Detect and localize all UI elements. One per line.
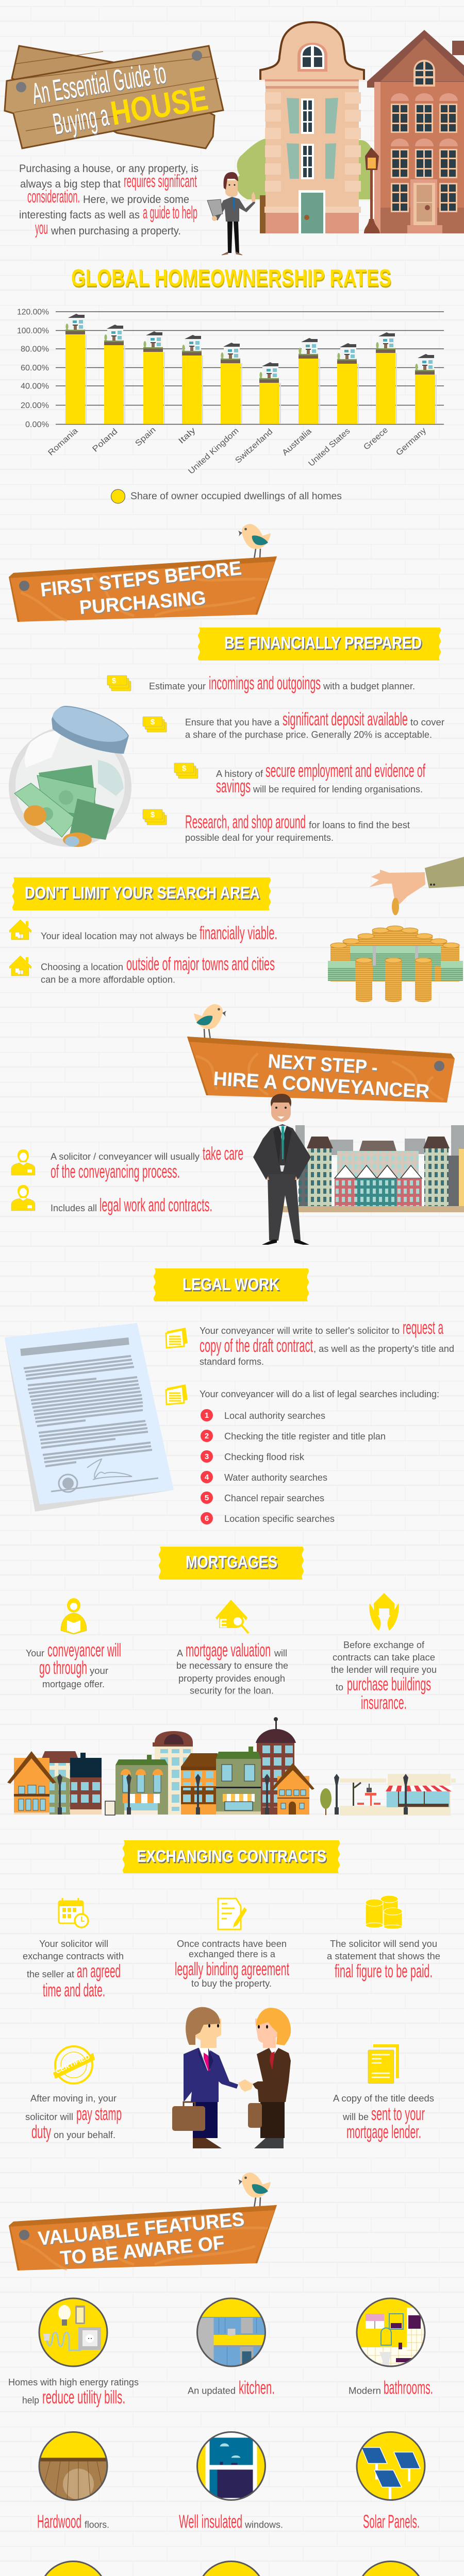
feature: energy ratings: Homes with high energy ratings	[8, 2377, 139, 2387]
mortgage column 3: contracts can take place	[333, 1652, 435, 1663]
intro paragraph: Here, we provide some	[83, 194, 189, 206]
numbered list of legal searches: Checking flood risk	[224, 1452, 305, 1462]
mortgage column 3: Before exchange of	[343, 1640, 425, 1650]
item: draft contract	[166, 1317, 454, 1367]
sign: first steps before purchasing: PURCHASING	[78, 587, 207, 619]
numbered list of legal searches: 3	[205, 1452, 209, 1461]
house markers	[65, 314, 435, 383]
stamp duty column: After moving in, your	[30, 2093, 117, 2104]
chart legend	[111, 489, 342, 503]
pile of coins and cash	[328, 926, 463, 1002]
conveyancer figure	[253, 1094, 311, 1245]
exchange column 2: legally binding agreement	[175, 1958, 289, 1979]
item: viability	[9, 920, 277, 943]
title deeds column: will be	[342, 2112, 369, 2122]
item: take care	[11, 1143, 243, 1182]
item: incomings and outgoings	[107, 672, 415, 693]
sign: next step hire a conveyancer	[187, 1037, 455, 1103]
intro paragraph: Purchasing a house, or any property, is	[19, 163, 198, 175]
item: legal work: Includes all	[51, 1203, 97, 1213]
list: search area	[9, 920, 277, 985]
x axis labels: United States	[307, 427, 352, 468]
hand dropping coin	[369, 857, 464, 915]
item: outside major towns	[9, 953, 275, 985]
sign: valuable features to be aware of	[9, 2205, 277, 2270]
feature: hardwood floors: Hardwood	[37, 2511, 81, 2532]
mortgage column 2: be necessary to ensure the	[176, 1660, 288, 1671]
sign: first steps before purchasing	[9, 556, 277, 622]
banner: be financially prepared: BE FINANCIALLY PREPARED	[224, 633, 422, 652]
item: legal work: legal work and contracts.	[100, 1194, 212, 1215]
y axis labels: 100.00%	[17, 327, 49, 335]
banner: exchanging contracts: EXCHANGING CONTRACTS	[137, 1846, 326, 1866]
contract document illustration	[5, 1323, 174, 1512]
mortgage column 2: will	[274, 1648, 287, 1658]
feature: kitchen	[188, 2298, 275, 2398]
numbered list of legal searches: 6	[205, 1514, 209, 1523]
coins	[24, 805, 46, 826]
icon circle: fireplace	[202, 2561, 260, 2576]
tree	[325, 1806, 326, 1815]
intro paragraph: interesting facts as well as	[19, 209, 140, 221]
mortgage column 2: security for the loan.	[190, 1686, 274, 1696]
item: draft contract: copy of the draft contract	[200, 1335, 313, 1356]
icon circle: window	[197, 2430, 265, 2502]
item: outside major towns: can be a more affordable option.	[41, 975, 175, 985]
item: employment: A history of	[216, 769, 263, 779]
icon: documents	[368, 2044, 399, 2083]
town street illustration	[278, 1125, 464, 1212]
x axis labels: Poland	[91, 427, 120, 454]
feature: energy ratings	[8, 2298, 139, 2408]
y axis labels	[17, 308, 49, 429]
sign: valuable features to be aware of: TO BE AWARE OF	[59, 2232, 225, 2269]
banner: legal work	[154, 1268, 309, 1301]
feature: bathrooms	[349, 2298, 433, 2398]
exchange column 2: exchanged there is a	[189, 1949, 276, 1959]
item: deposit: $	[151, 718, 155, 726]
right man	[248, 2008, 291, 2148]
orange brown building	[181, 1753, 218, 1767]
banner: don't limit your search area	[12, 877, 271, 910]
mortgage column 1: Your	[26, 1648, 44, 1658]
back plank	[12, 46, 214, 148]
numbered list of legal searches: Local authority searches	[224, 1411, 325, 1421]
list: conveyancer duties	[11, 1143, 243, 1215]
text: a guide to help	[143, 203, 197, 223]
item: viability: Your ideal location may not always be	[41, 931, 197, 941]
x axis labels: Spain	[134, 426, 158, 448]
mortgage column 1: go through	[39, 1657, 87, 1678]
bird on third sign	[238, 2173, 271, 2208]
sign: valuable features to be aware of: VALUABLE FEATURES	[37, 2209, 245, 2250]
money jar illustration	[9, 706, 131, 847]
mortgage column 2	[176, 1600, 288, 1696]
exchange column 1: exchange contracts with	[23, 1951, 124, 1961]
item: outside major towns: Choosing a location	[41, 962, 123, 972]
item: viability: financially viable.	[200, 922, 277, 943]
item: take care: A solicitor / conveyancer will usually	[51, 1151, 200, 1162]
title deeds column: A copy of the title deeds	[333, 2093, 434, 2104]
item: deposit: Ensure that you have a	[185, 717, 280, 727]
intro paragraph	[19, 163, 198, 238]
x axis labels: Greece	[362, 426, 390, 452]
x axis labels: Switzerland	[234, 427, 274, 465]
banner: mortgages: MORTGAGES	[186, 1552, 277, 1571]
legal work text	[166, 1317, 454, 1404]
icon: hands holding house	[369, 1593, 399, 1631]
title deeds column	[333, 2044, 434, 2142]
item: incomings and outgoings: with a budget planner.	[323, 681, 415, 691]
item: incomings and outgoings: $	[112, 676, 117, 685]
item: employment	[174, 760, 426, 796]
numbered list of legal searches	[201, 1409, 386, 1524]
exchange column 1	[23, 1898, 124, 2001]
icon circle: garden	[362, 2561, 420, 2576]
icon circle: suitcases	[44, 2561, 102, 2576]
x axis labels: Italy	[177, 426, 197, 446]
bars	[65, 334, 437, 424]
mortgage column 3: the lender will require you	[331, 1665, 437, 1675]
exchange column 1: time and date.	[43, 1979, 105, 2001]
sign: first steps before purchasing: FIRST STEPS BEFORE	[39, 557, 243, 601]
banner: don't limit your search area: DON'T LIMIT YOUR SEARCH AREA	[25, 883, 260, 902]
banner: be financially prepared	[198, 628, 441, 660]
stamp duty column	[25, 2046, 122, 2142]
item: research: Research, and shop around	[185, 811, 306, 833]
street lamp	[364, 147, 380, 233]
icon circle: solar panels	[357, 2432, 425, 2502]
wooden title sign: HOUSE	[108, 78, 211, 132]
item: research: for loans to find the best	[309, 820, 410, 831]
mortgage column 1: conveyancer will	[47, 1639, 121, 1660]
cash bundles	[328, 946, 463, 981]
stamp duty column: pay stamp	[76, 2103, 122, 2124]
bird on first sign	[238, 524, 271, 559]
feature: hardwood floors: floors.	[85, 2519, 109, 2530]
stamp duty column: on your behalf.	[54, 2130, 115, 2140]
title text: Buying a	[51, 98, 111, 141]
item: employment: will be required for lending organisations.	[253, 784, 423, 794]
feature: energy ratings: help	[22, 2395, 39, 2405]
item: deposit: to cover	[410, 717, 444, 727]
front coin stacks	[356, 958, 432, 1002]
trees behind houses	[236, 139, 373, 199]
stamp duty column: solicitor will	[25, 2112, 73, 2122]
item: draft contract: Your conveyancer will write to seller's solicitor to	[200, 1326, 400, 1336]
icon: certified stamp: CERTIFIED	[54, 2053, 91, 2075]
exchange column 1: the seller at	[27, 1969, 74, 1979]
item: employment: $	[182, 764, 187, 773]
board sign	[105, 1801, 115, 1815]
intro paragraph: requires significant	[124, 172, 197, 191]
wooden title sign	[5, 46, 223, 148]
two businessmen shaking hands	[172, 2007, 291, 2148]
exchange column 2	[175, 1899, 289, 1989]
item: searches	[166, 1384, 439, 1404]
exchange column 1: an agreed	[77, 1960, 121, 1981]
feature: kitchen: kitchen.	[239, 2377, 275, 2398]
intro paragraph: you	[35, 218, 48, 238]
y axis labels: 40.00%	[21, 382, 49, 391]
left orange house	[14, 1758, 49, 1815]
mortgage column 1: your	[90, 1666, 108, 1676]
feature: insulated windows: Well insulated	[179, 2511, 242, 2532]
green shop	[115, 1765, 168, 1815]
mortgage column 3	[331, 1593, 437, 1713]
jar lid	[52, 706, 129, 754]
feature: storage	[44, 2561, 102, 2576]
bar chart: global homeownership rates	[17, 308, 444, 476]
y axis labels: 80.00%	[21, 345, 49, 353]
mortgage column 1	[26, 1598, 121, 1689]
feature: insulated windows: windows.	[244, 2519, 283, 2530]
item: research: $	[151, 810, 155, 819]
icon circle: kitchen	[197, 2298, 265, 2369]
numbered list of legal searches: Checking the title register and title plan	[224, 1431, 386, 1442]
businessman with tablet	[207, 172, 255, 255]
item: draft contract: , as well as the property's title and	[313, 1344, 454, 1354]
feature: fireplaces	[202, 2561, 260, 2576]
intro paragraph: always a big step that	[20, 178, 121, 190]
feature: energy ratings: reduce utility bills.	[42, 2386, 125, 2408]
exchange column 2: Once contracts have been	[177, 1939, 287, 1949]
front plank	[5, 46, 223, 148]
feature: insulated windows	[179, 2430, 283, 2532]
x axis labels	[46, 426, 428, 476]
item: outside major towns: outside of major towns and cities	[126, 953, 275, 974]
numbered list of legal searches: 5	[205, 1494, 209, 1502]
icon circle: bathroom	[357, 2298, 425, 2368]
street lamps	[59, 1785, 407, 1815]
tan house	[260, 22, 364, 233]
banner: exchanging contracts	[123, 1840, 340, 1873]
intro paragraph: when purchasing a property.	[51, 225, 181, 237]
item: deposit	[143, 708, 444, 740]
mortgage column 2: mortgage valuation	[186, 1639, 271, 1660]
back coin stacks	[330, 926, 459, 981]
feature: solar panels	[357, 2432, 425, 2532]
olive building	[216, 1759, 261, 1815]
icon circle: hardwood	[39, 2432, 107, 2503]
icon: person with book	[61, 1598, 87, 1634]
item: deposit: a share of the purchase price. Generally 20% is acceptable.	[185, 730, 432, 740]
left man	[172, 2007, 253, 2148]
y axis labels: 60.00%	[21, 364, 49, 372]
icon: house with magnifier: E	[219, 1617, 227, 1631]
icon: coin stacks	[366, 1895, 402, 1929]
x axis labels: Germany	[394, 426, 428, 457]
mortgage column 2: property provides enough	[178, 1673, 285, 1684]
numbered list of legal searches: Location specific searches	[224, 1514, 335, 1524]
item: take care: take care	[203, 1143, 243, 1164]
item: incomings and outgoings: incomings and outgoings	[209, 672, 321, 693]
sign: next step hire a conveyancer: HIRE A CONVEYANCER	[212, 1068, 430, 1103]
feature: hardwood floors	[37, 2432, 109, 2532]
list: financial preparation	[107, 672, 444, 843]
banknotes	[39, 765, 95, 829]
stamp duty column: duty	[31, 2121, 51, 2142]
item: research	[143, 809, 410, 843]
mortgage column 1: mortgage offer.	[42, 1679, 105, 1689]
feature: garden	[362, 2561, 420, 2576]
exchange column 1: Your solicitor will	[39, 1939, 108, 1949]
feature: kitchen: An updated	[188, 2385, 236, 2396]
y axis labels: 120.00%	[17, 308, 49, 316]
colourful town illustration	[7, 1717, 456, 1816]
icon: document and pen	[218, 1899, 247, 1929]
feature: bathrooms: Modern	[349, 2385, 381, 2396]
sign: next step hire a conveyancer: NEXT STEP -	[267, 1050, 378, 1079]
item: research: possible deal for your requirements.	[185, 833, 334, 843]
y axis labels: 0.00%	[25, 420, 49, 429]
title text	[30, 56, 169, 141]
numbered list of legal searches: Chancel repair searches	[224, 1493, 324, 1503]
wooden title sign: An Essential Guide to	[30, 56, 169, 111]
exchange column 3: The solicitor will send you	[330, 1939, 437, 1949]
bird on second sign	[194, 1004, 226, 1039]
numbered list of legal searches: Water authority searches	[224, 1472, 327, 1483]
icon: certified stamp	[53, 2046, 95, 2083]
mortgage column 2: A	[177, 1648, 183, 1658]
item: incomings and outgoings: Estimate your	[149, 681, 206, 691]
icon: house with magnifier	[216, 1600, 248, 1633]
numbered list of legal searches: 4	[205, 1473, 209, 1482]
item: draft contract: standard forms.	[200, 1357, 264, 1367]
mortgage column 3: to	[336, 1682, 343, 1692]
item: legal work	[11, 1185, 212, 1215]
y axis labels: 20.00%	[21, 401, 49, 410]
exchange column 3	[327, 1895, 440, 1981]
cafe and shop	[340, 1778, 386, 1783]
back buildings	[40, 1751, 80, 1763]
x axis labels: Romania	[46, 427, 80, 457]
nails	[192, 50, 202, 61]
exchange column 2: to buy the property.	[191, 1978, 272, 1989]
x axis labels: Australia	[280, 427, 313, 457]
item: searches: Your conveyancer will do a list of legal searches including:	[200, 1389, 439, 1399]
banner: mortgages	[159, 1547, 304, 1580]
x axis labels: United Kingdom	[187, 427, 241, 476]
icon circle: energy	[39, 2298, 107, 2366]
intro paragraph: consideration.	[27, 187, 80, 207]
numbered list of legal searches: 2	[205, 1432, 209, 1440]
item: take care: of the conveyancing process.	[51, 1161, 180, 1182]
numbered list of legal searches: 1	[205, 1411, 209, 1420]
icon: calendar and clock	[59, 1898, 88, 1927]
exchange column 3: a statement that shows the	[327, 1951, 440, 1961]
banner: legal work: LEGAL WORK	[183, 1275, 279, 1294]
chart legend: Share of owner occupied dwellings of all homes	[130, 491, 342, 502]
item: employment: savings	[216, 775, 251, 796]
mortgage column 3: insurance.	[361, 1692, 407, 1713]
right orange house	[277, 1776, 309, 1815]
brick house	[367, 30, 464, 233]
